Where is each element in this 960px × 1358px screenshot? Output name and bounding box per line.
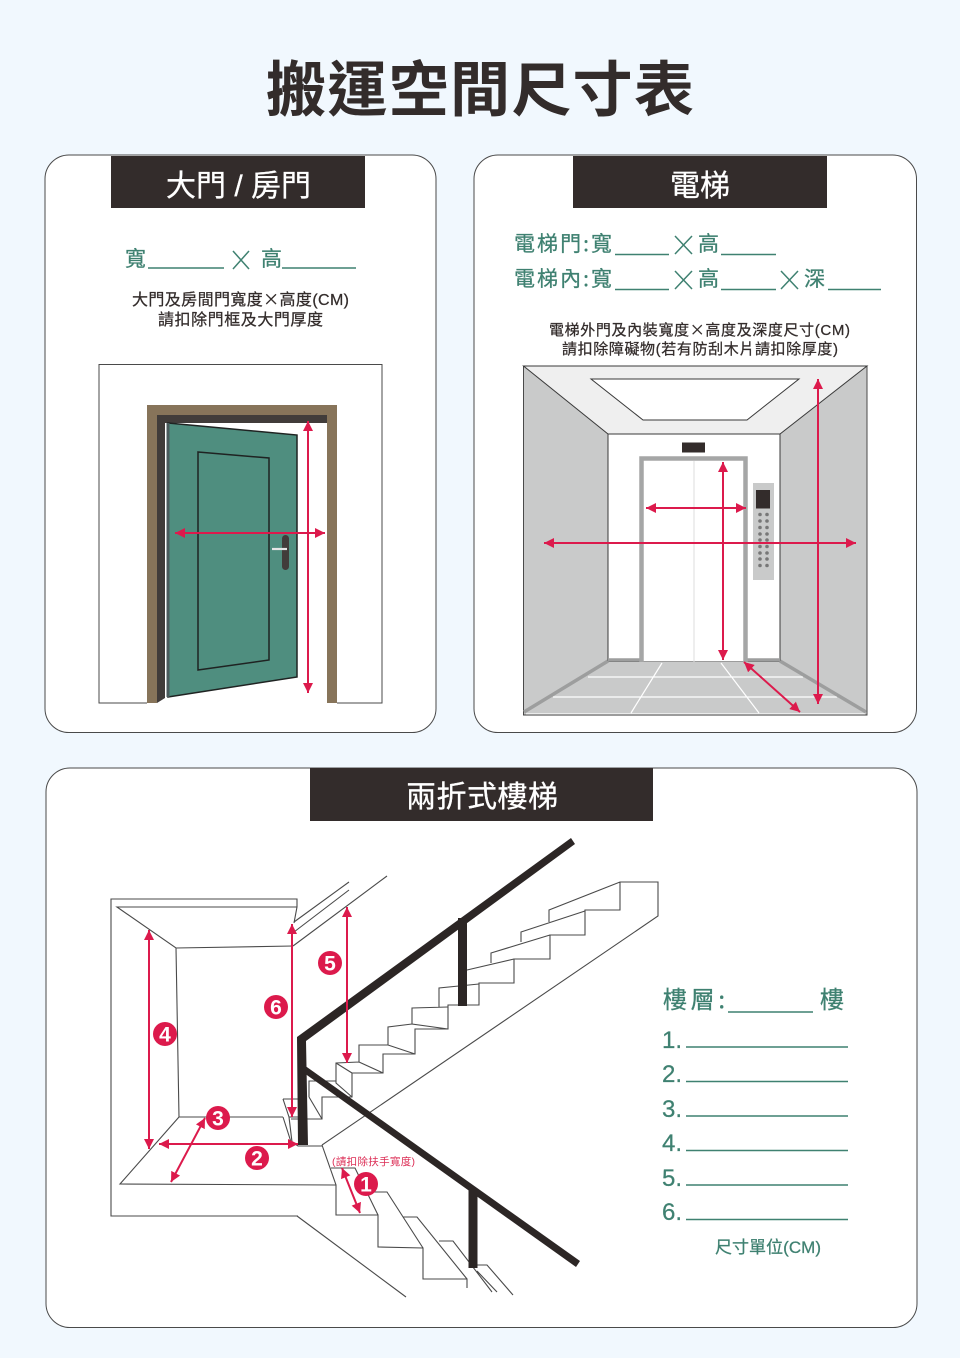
form: measurements list: 1. [662, 1027, 682, 1054]
stair arrows [149, 907, 360, 1213]
form: measurements list [662, 1027, 848, 1226]
form: floor [663, 980, 844, 1015]
marker 4 [153, 1022, 177, 1046]
form: measurements list: 2. [662, 1061, 682, 1088]
marker 5 [318, 951, 342, 976]
heading: door [111, 156, 365, 208]
panel: stairs [46, 768, 917, 1328]
stair line drawing [111, 876, 658, 1297]
form lines: elevator size: 電梯門:寬 [514, 228, 612, 258]
marker 3 [206, 1106, 230, 1130]
title: 搬運空間尺寸表 [266, 57, 694, 124]
elevator arrows [544, 379, 856, 712]
marker 3: 3 [212, 1108, 224, 1130]
form: measurements list: 6. [662, 1199, 682, 1226]
marker 2: 2 [251, 1148, 263, 1170]
marker 6: 6 [270, 996, 282, 1020]
unit note: 尺寸單位(CM) [715, 1238, 821, 1257]
elevator instructions [549, 319, 850, 358]
elevator instructions: 電梯外門及內裝寬度×高度及深度尺寸(CM) [549, 319, 850, 340]
form lines: elevator size: 高 [698, 268, 719, 291]
panel: door [45, 155, 436, 732]
marker 4: 4 [159, 1024, 171, 1046]
marker 2 [245, 1146, 269, 1170]
door illustration [99, 364, 382, 703]
door width arrow [175, 532, 325, 534]
handrails [297, 838, 580, 1268]
form line: door size: 高 [261, 248, 282, 271]
form: measurements list: 4. [662, 1130, 682, 1157]
handrail note: (請扣除扶手寬度) [332, 1155, 415, 1168]
marker 6 [264, 995, 288, 1020]
heading: stairs: 兩折式樓梯 [406, 781, 558, 814]
elevator illustration [524, 366, 867, 715]
form lines: elevator size: 深 [804, 268, 825, 291]
form lines: elevator size: 電梯內:寬 [514, 263, 612, 293]
elevator instructions: 請扣除障礙物(若有防刮木片請扣除厚度) [562, 340, 838, 358]
form line: door size [125, 248, 356, 271]
heading: elevator: 電梯 [670, 170, 730, 203]
heading: stairs [310, 768, 653, 821]
form: measurements list: 3. [662, 1096, 682, 1123]
heading: door: 大門 / 房門 [166, 170, 311, 203]
door height arrow [307, 421, 309, 693]
form: floor: 樓層: [663, 980, 725, 1015]
marker 1 [354, 1172, 378, 1196]
heading: elevator [573, 156, 827, 208]
form line: door size: 寬 [125, 248, 146, 271]
form lines: elevator size [514, 228, 881, 293]
panel: elevator [474, 155, 916, 732]
form: measurements list: 5. [662, 1165, 682, 1192]
marker 1: 1 [360, 1174, 372, 1196]
form lines: elevator size: 高 [698, 233, 719, 256]
door instructions: 大門及房間門寬度×高度(CM) [132, 286, 349, 310]
door instructions [132, 286, 349, 329]
marker 5: 5 [324, 952, 336, 976]
form: floor: 樓 [820, 987, 844, 1014]
door instructions: 請扣除門框及大門厚度 [158, 311, 323, 329]
